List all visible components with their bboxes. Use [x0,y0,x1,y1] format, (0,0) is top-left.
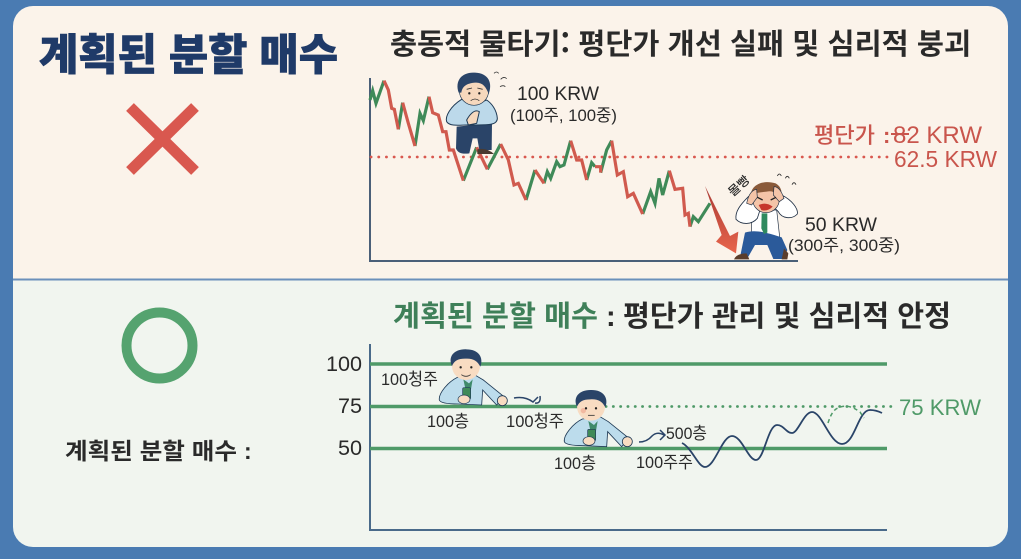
chart axes [370,78,798,261]
icon: green circle [126,312,192,378]
heading: planned buying: 계획된 분할 매수 [393,293,598,335]
label: all-in: 몰빵 [724,171,753,200]
label: second tier: 100층 [554,454,596,473]
label: average price: 평단가 [814,118,875,150]
arrow: plunge [705,186,738,253]
label: average price: 62.5 KRW [894,146,997,172]
illustration: calm investor two [564,390,632,447]
average price dotted line [371,156,890,158]
price wave [682,410,882,467]
price line segments [370,81,710,227]
label: average price: : [883,123,890,148]
illustration: calm investor one [439,349,507,406]
heading: planned buying [393,293,951,335]
label: planned buying: : [244,438,252,464]
dashed rebound arc [828,406,864,423]
heading: planned buying: 평단가 관리 및 심리적 안정 [623,293,951,335]
label: 100 KRW: 100 KRW [517,84,599,105]
label: second tranche: 100청주 [506,412,564,431]
label: third tier: 500층 [666,424,707,443]
sweat marks [494,72,507,87]
stress marks [777,174,796,185]
panel divider [13,278,1008,280]
chart axes [370,344,887,530]
axis label: 100: 100 [326,353,362,376]
panel: planned buying (bottom) [13,280,1008,548]
label: 100 KRW [510,84,617,125]
illustration: worried investor [446,72,507,154]
label: 50 KRW [788,215,900,255]
axis label: 50: 50 [338,437,362,460]
illustration: panicked investor [734,174,797,259]
average price dotted line [606,405,894,408]
heading: planned buying: : [606,301,616,333]
label: average price [814,118,997,172]
label: tranche 100 top: 100청주 [381,370,438,389]
label: planned buying: 계획된 분할 매수 [65,432,237,466]
tranche lines [370,364,887,448]
chart: planned tranche chart [326,344,894,530]
label: average price: 82 KRW [893,122,982,149]
label: 75 KRW: 75 KRW [899,395,981,420]
label: 100 KRW: (100주, 100중) [510,106,617,125]
title: 계획된 분할 매수 [39,21,338,83]
label: 50 KRW: 50 KRW [805,215,877,236]
icon: red X [130,107,195,171]
arrow: first tranche [514,396,540,403]
axis label: 75: 75 [338,395,362,418]
arrow: second tranche [639,430,665,442]
label: first tier: 100층 [427,412,469,431]
label: 50 KRW: (300주, 300중) [788,236,900,255]
label: third tranche: 100주주 [636,453,693,472]
chart: falling price chart [370,78,890,261]
heading: impulsive averaging: 충동적 물타기: 평단가 개선 실패 및 심리적 붕괴 [390,21,971,63]
